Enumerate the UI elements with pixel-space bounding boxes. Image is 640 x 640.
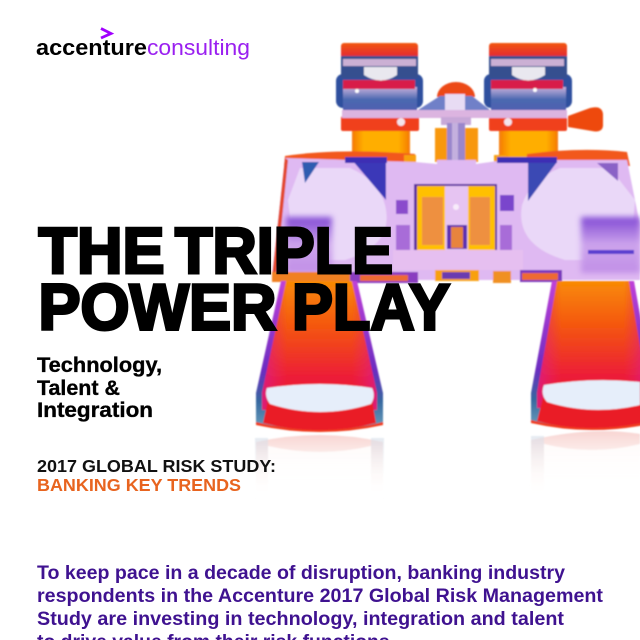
intro paragraph: Study are investing in technology, integration and talent <box>37 609 565 630</box>
logo: accenture consulting: accenture <box>36 35 147 60</box>
center focus knob and bridge <box>342 82 567 162</box>
subtitle: Technology, <box>37 354 162 377</box>
title: POWER <box>38 270 276 344</box>
left eyepiece barrel <box>336 43 423 158</box>
right objective cone <box>531 281 640 430</box>
title <box>38 214 450 344</box>
intro paragraph <box>37 563 604 640</box>
left objective cone <box>256 281 383 432</box>
left lens lobe <box>288 168 387 260</box>
lower bridge bar <box>393 250 523 270</box>
main body lavender housing <box>272 158 640 280</box>
study label <box>37 456 276 495</box>
study label: BANKING KEY TRENDS <box>37 475 241 495</box>
subtitle: Integration <box>37 399 153 422</box>
study label: 2017 GLOBAL RISK STUDY: <box>37 456 276 476</box>
blue triangles on housing <box>302 157 618 201</box>
right lens lobe <box>521 168 635 260</box>
focus thumb lever <box>568 107 603 131</box>
main body top orange edges <box>284 150 630 166</box>
logo: accenture consulting <box>36 28 250 60</box>
lens reflection on floor <box>255 431 640 500</box>
subtitle <box>37 354 162 422</box>
binoculars photo illustration <box>255 43 640 500</box>
subtitle: Talent & <box>37 377 120 400</box>
title: THE <box>38 214 164 287</box>
intro paragraph: respondents in the Accenture 2017 Global Risk Management <box>37 586 604 607</box>
intro paragraph: To keep pace in a decade of disruption, banking industry <box>37 563 565 584</box>
title: TRIPLE <box>175 214 393 287</box>
icon: greater-than mark <box>101 28 111 38</box>
lower body details <box>272 270 562 283</box>
title: PLAY <box>292 270 450 344</box>
logo: accenture consulting: consulting <box>147 35 250 60</box>
purple shaded patches <box>286 195 640 273</box>
central prism mechanism <box>414 184 497 251</box>
right eyepiece barrel <box>484 43 572 158</box>
